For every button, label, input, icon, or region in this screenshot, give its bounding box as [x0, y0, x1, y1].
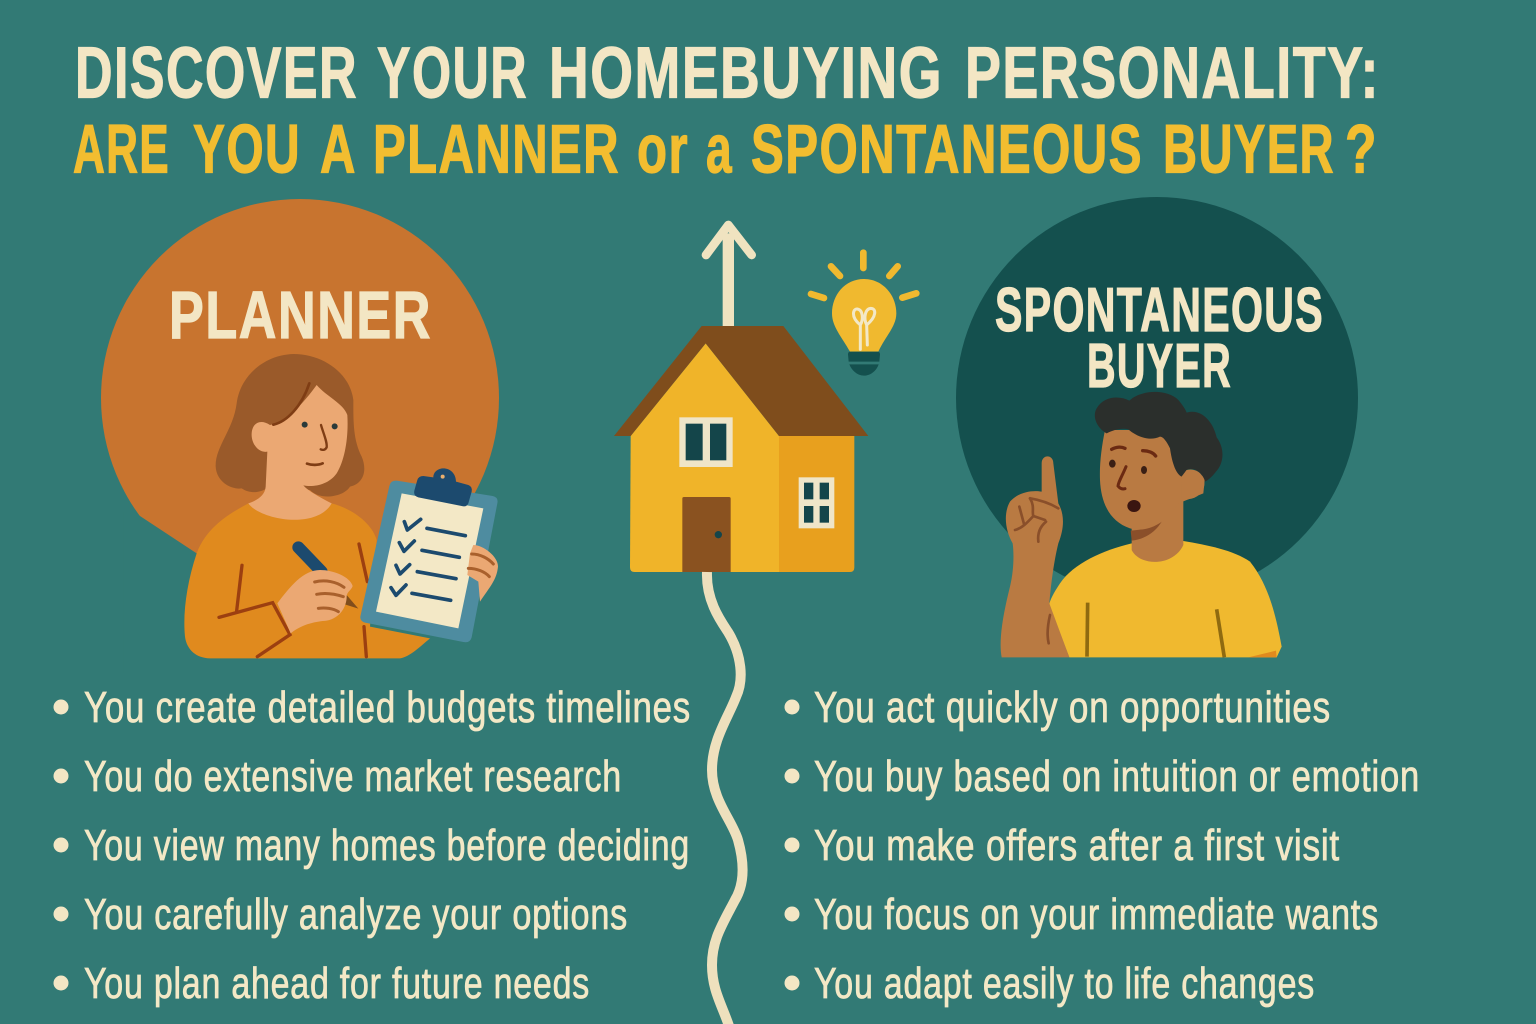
paper — [376, 493, 483, 628]
filament — [853, 308, 875, 349]
up arrow — [706, 225, 752, 327]
man's face details — [1109, 447, 1156, 512]
neck shadow — [1131, 521, 1162, 541]
facial features — [273, 383, 338, 465]
title line 2: YOU — [193, 110, 301, 188]
sweater fold lines — [219, 544, 367, 657]
title — [73, 34, 1380, 188]
front window — [679, 417, 733, 467]
title line 2: SPONTANEOUS — [751, 110, 1143, 188]
title line 2: a — [706, 110, 733, 188]
face and neck — [248, 385, 348, 520]
base — [848, 352, 880, 376]
trait 4: You focus on your immediate wants — [814, 890, 1379, 939]
trait 1: You act quickly on opportunities — [814, 683, 1331, 732]
shirt fold lines — [1087, 603, 1224, 657]
sleeve shade — [1248, 651, 1277, 657]
neck — [1132, 493, 1183, 562]
planner heading: PLANNER — [169, 278, 432, 353]
roof — [614, 326, 868, 436]
ear — [1182, 469, 1204, 499]
title line 1: YOUR — [377, 34, 528, 114]
title line 2: BUYER — [1163, 110, 1335, 188]
panel: spontaneous buyer — [956, 197, 1358, 657]
checklist — [391, 519, 465, 600]
finger and wrist lines — [1015, 498, 1058, 643]
side window — [799, 477, 834, 528]
holding hand finger lines — [468, 554, 493, 577]
list: planner traits — [54, 683, 691, 1008]
pen — [298, 547, 358, 609]
hair — [216, 354, 364, 497]
spontaneous circle — [956, 197, 1358, 599]
t-shirt — [1049, 541, 1282, 657]
trait 1: You create detailed budgets timelines — [84, 683, 691, 732]
spontaneous heading: BUYER — [1087, 332, 1232, 401]
writing hand — [277, 570, 353, 633]
trait 2: You do extensive market research — [84, 752, 622, 801]
title line 2: PLANNER — [373, 110, 620, 188]
trait 5: You adapt easily to life changes — [814, 959, 1315, 1008]
rays — [811, 253, 916, 298]
sweater — [184, 503, 430, 658]
clipboard — [360, 468, 498, 642]
title line 1: DISCOVER — [75, 34, 358, 114]
title line 2: ARE — [73, 110, 170, 188]
hair — [1095, 392, 1222, 482]
raised arm and hand — [1001, 456, 1069, 657]
title line 1: HOMEBUYING — [549, 34, 943, 114]
title line 2: A — [320, 110, 355, 188]
trait 3: You view many homes before deciding — [84, 821, 690, 870]
glass — [832, 279, 896, 352]
title line 1: PERSONALITY: — [965, 34, 1380, 114]
trait 3: You make offers after a first visit — [814, 821, 1340, 870]
planner character — [123, 354, 523, 673]
clip — [414, 468, 472, 506]
spontaneous heading: SPONTANEOUS — [995, 276, 1324, 345]
list: spontaneous traits — [784, 683, 1420, 1008]
house side wall — [779, 436, 854, 572]
house front wall — [630, 343, 779, 572]
buyer character — [1001, 392, 1282, 657]
planner circle — [101, 199, 499, 597]
door — [682, 497, 731, 572]
teal cut-out below circle — [123, 497, 523, 673]
spontaneous heading — [995, 276, 1324, 401]
finger lines — [315, 581, 344, 612]
trait 5: You plan ahead for future needs — [84, 959, 590, 1008]
icon: light bulb — [811, 253, 916, 376]
title line 2: or — [637, 110, 689, 188]
wavy path — [707, 572, 743, 1024]
panel: centre house — [614, 225, 868, 572]
clipboard board — [360, 481, 498, 642]
title line 2: ? — [1345, 110, 1378, 188]
panel: planner — [101, 199, 523, 673]
holding hand — [467, 545, 498, 602]
head — [1100, 430, 1205, 530]
trait 4: You carefully analyze your options — [84, 890, 628, 939]
